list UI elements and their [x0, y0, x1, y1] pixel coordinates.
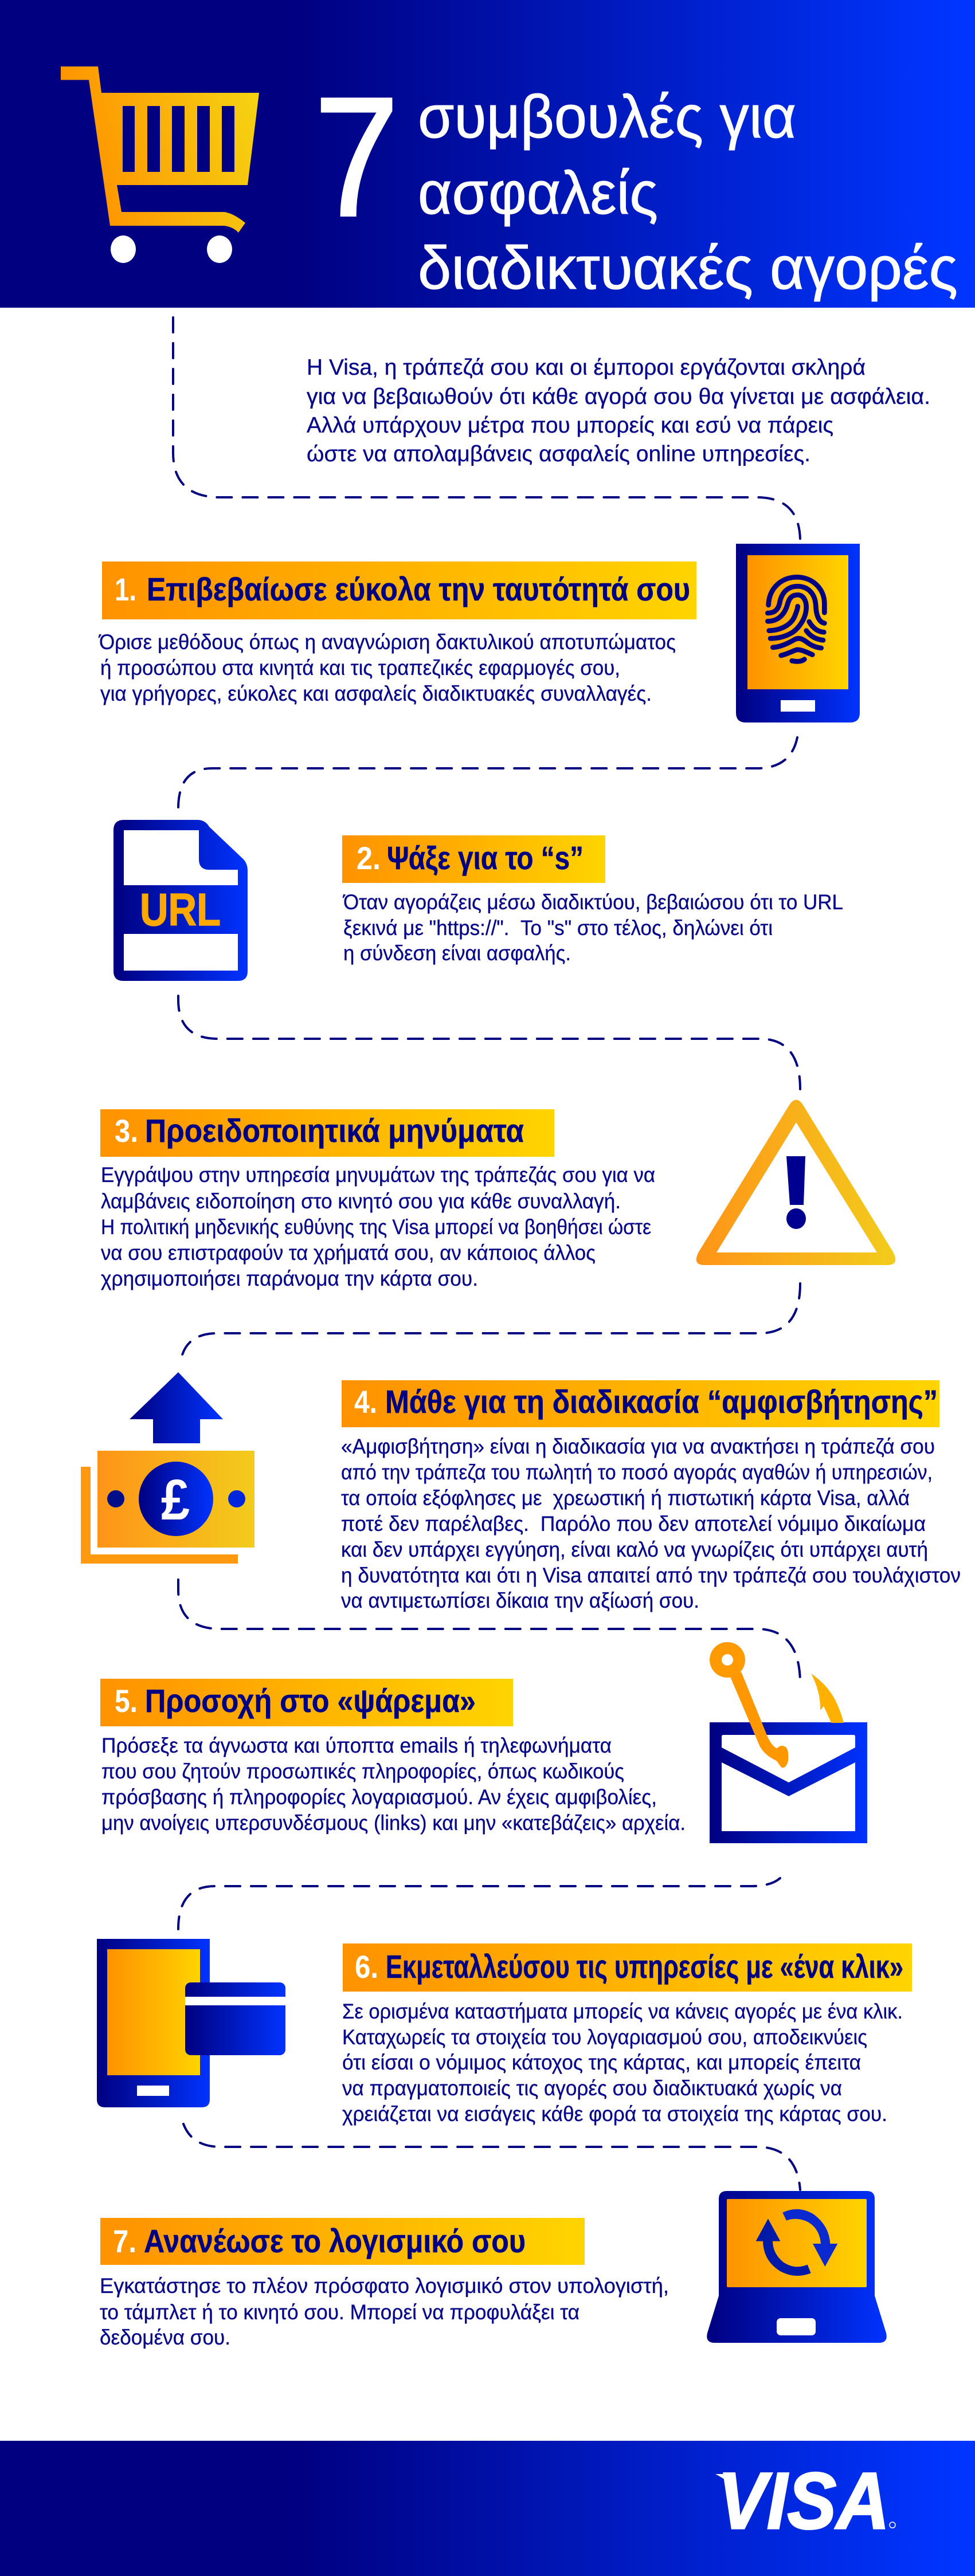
icon: laptop with refresh arrows [707, 2191, 887, 2343]
text block 5: πρόσβασης ή πληροφορίες λογαριασμού. Αν έχεις αμφιβολίες, [101, 1785, 657, 1809]
heading 2: Ψάξε για το “s” [387, 840, 584, 877]
text block 2 [342, 890, 843, 965]
dashed connector: tip 3 to tip 4 [181, 1283, 800, 1362]
icon: warning triangle [696, 1100, 895, 1265]
dashed connector: tip 6 to tip 7 [183, 2124, 800, 2190]
text block 5: που σου ζητούν προσωπικές πληροφορίες, όπως κωδικούς [101, 1760, 624, 1783]
text block 4: τα οποία εξόφλησες με χρεωστική ή πιστωτική κάρτα Visa, αλλά [341, 1486, 910, 1510]
dashed connector: intro to tip 1 [173, 317, 800, 541]
title number 7: 7 [314, 62, 399, 252]
text block 5: Πρόσεξε τα άγνωστα και ύποπτα emails ή τηλεφωνήματα [101, 1734, 612, 1757]
heading 5 [100, 1679, 513, 1726]
panel: tip 6 [97, 1939, 912, 2126]
text block 4: από την τράπεζα του πωλητή το ποσό αγοράς αγαθών ή υπηρεσιών, [341, 1460, 933, 1484]
text block 6: να πραγματοποιείς τις αγορές σου διαδικτυακά χωρίς να [342, 2076, 842, 2100]
text block 1: ή προσώπου στα κινητά και τις τραπεζικές εφαρμογές σου, [100, 656, 620, 680]
intro text [307, 355, 930, 466]
panel: tip 5 [100, 1642, 867, 1843]
heading 3: Προειδοποιητικά μηνύματα [145, 1113, 524, 1149]
dashed connector: tip 4 to tip 5 [178, 1580, 800, 1684]
title text: ασφαλείς [418, 159, 658, 227]
heading 1: Επιβεβαίωσε εύκολα την ταυτότητά σου [147, 571, 690, 608]
text block 6: ότι είσαι ο νόμιμος κάτοχος της κάρτας, και μπορείς έπειτα [342, 2051, 861, 2074]
text block 2: η σύνδεση είναι ασφαλής. [343, 941, 571, 965]
icon: money with arrow [81, 1372, 254, 1564]
text block 3: Η πολιτική μηδενικής ευθύνης της Visa μπορεί να βοηθήσει ώστε [101, 1215, 651, 1239]
heading 4: 4. [354, 1384, 377, 1420]
intro text: ώστε να απολαμβάνεις ασφαλείς online υπηρεσίες. [307, 442, 810, 466]
panel: tip 2 [113, 820, 843, 981]
text block 3 [101, 1163, 655, 1290]
text block 4: «Αμφισβήτηση» είναι η διαδικασία για να ανακτήσει η τράπεζά σου [341, 1435, 935, 1458]
panel: tip 4 [81, 1372, 961, 1612]
heading 5: Προσοχή στο «ψάρεμα» [145, 1683, 476, 1719]
heading 7: Ανανέωσε το λογισμικό σου [144, 2223, 526, 2260]
icon: money with arrow: £ [161, 1468, 190, 1532]
text block 7: δεδομένα σου. [100, 2326, 230, 2349]
text block 2: Όταν αγοράζεις μέσω διαδικτύου, βεβαιώσου ότι το URL [342, 890, 843, 914]
icon: phone and card [97, 1939, 285, 2107]
text block 6 [342, 2000, 903, 2126]
intro text: Η Visa, η τράπεζά σου και οι έμποροι εργάζονται σκληρά [307, 355, 866, 380]
text block 4: να αντιμετωπίσει δίκαια την αξίωσή σου. [341, 1589, 699, 1612]
panel: tip 7 [100, 2191, 887, 2349]
icon: envelope with fish hook [710, 1642, 867, 1843]
heading 1 [102, 561, 696, 619]
dashed connector: tip 2 to tip 3 [178, 996, 800, 1089]
text block 3: λαμβάνεις ειδοποίηση στο κινητό σου για κάθε συναλλαγή. [101, 1189, 621, 1213]
Visa logo: VISA [718, 2456, 890, 2546]
text block 5: μην ανοίγεις υπερσυνδέσμους (links) και μην «κατεβάζεις» αρχεία. [101, 1811, 686, 1835]
heading 2: 2. [357, 840, 381, 876]
heading 7: 7. [113, 2223, 136, 2259]
heading 6 [343, 1943, 912, 1992]
text block 4: ποτέ δεν παρέλαβες. Παρόλο που δεν αποτελεί νόμιμο δικαίωμα [341, 1512, 926, 1536]
text block 1 [98, 630, 676, 705]
text block 5 [101, 1734, 686, 1835]
text block 6: χρειάζεται να εισάγεις κάθε φορά τα στοιχεία της κάρτας σου. [342, 2102, 887, 2126]
heading 4 [342, 1380, 939, 1427]
heading 3 [100, 1109, 554, 1157]
text block 2: ξεκινά με "https://". Το "s" στο τέλος, δηλώνει ότι [343, 916, 773, 940]
text block 4: και δεν υπάρχει εγγύηση, είναι καλό να γνωρίζεις ότι υπάρχει αυτή [341, 1538, 928, 1561]
text block 4 [341, 1435, 961, 1612]
dashed connector: tip 5 to tip 6 [178, 1878, 780, 1929]
heading 3: 3. [115, 1113, 138, 1149]
text block 4: η δυνατότητα και ότι η Visa απαιτεί από την τράπεζά σου τουλάχιστον [341, 1564, 961, 1587]
text block 6: Σε ορισμένα καταστήματα μπορείς να κάνεις αγορές με ένα κλικ. [342, 2000, 903, 2023]
icon: URL document [113, 820, 248, 981]
intro text: Αλλά υπάρχουν μέτρα που μπορείς και εσύ να πάρεις [307, 413, 833, 438]
intro text: για να βεβαιωθούν ότι κάθε αγορά σου θα γίνεται με ασφάλεια. [307, 384, 930, 409]
icon: phone with fingerprint [736, 544, 860, 722]
text block 7: το τάμπλετ ή το κινητό σου. Μπορεί να προφυλάξει τα [100, 2300, 579, 2324]
title text: διαδικτυακές αγορές [418, 234, 958, 302]
text block 6: Καταχωρείς τα στοιχεία του λογαριασμού σου, αποδεικνύεις [342, 2025, 867, 2049]
icon: shopping cart [61, 66, 259, 263]
header band [0, 0, 975, 308]
text block 1: Όρισε μεθόδους όπως η αναγνώριση δακτυλικού αποτυπώματος [98, 630, 676, 654]
heading 6: 6. [355, 1949, 378, 1985]
icon: URL document: URL [140, 884, 221, 935]
text block 7: Εγκατάστησε το πλέον πρόσφατο λογισμικό στον υπολογιστή, [100, 2274, 669, 2298]
title text: συμβουλές για [418, 83, 796, 151]
text block 1: για γρήγορες, εύκολες και ασφαλείς διαδικτυακές συναλλαγές. [100, 682, 652, 705]
text block 3: να σου επιστραφούν τα χρήματά σου, αν κάποιος άλλος [101, 1241, 596, 1265]
footer band [0, 2441, 975, 2576]
title text [418, 83, 958, 302]
heading 2 [342, 835, 605, 883]
dashed connector: tip 1 to tip 2 [178, 737, 797, 808]
panel: tip 3 [100, 1100, 895, 1290]
text block 3: χρησιμοποιήσει παράνομα την κάρτα σου. [101, 1267, 478, 1290]
heading 5: 5. [115, 1683, 138, 1719]
text block 7 [100, 2274, 669, 2349]
heading 1: 1. [115, 571, 136, 607]
text block 3: Εγγράψου στην υπηρεσία μηνυμάτων της τράπεζάς σου για να [101, 1163, 655, 1187]
panel: tip 1 [98, 544, 860, 722]
